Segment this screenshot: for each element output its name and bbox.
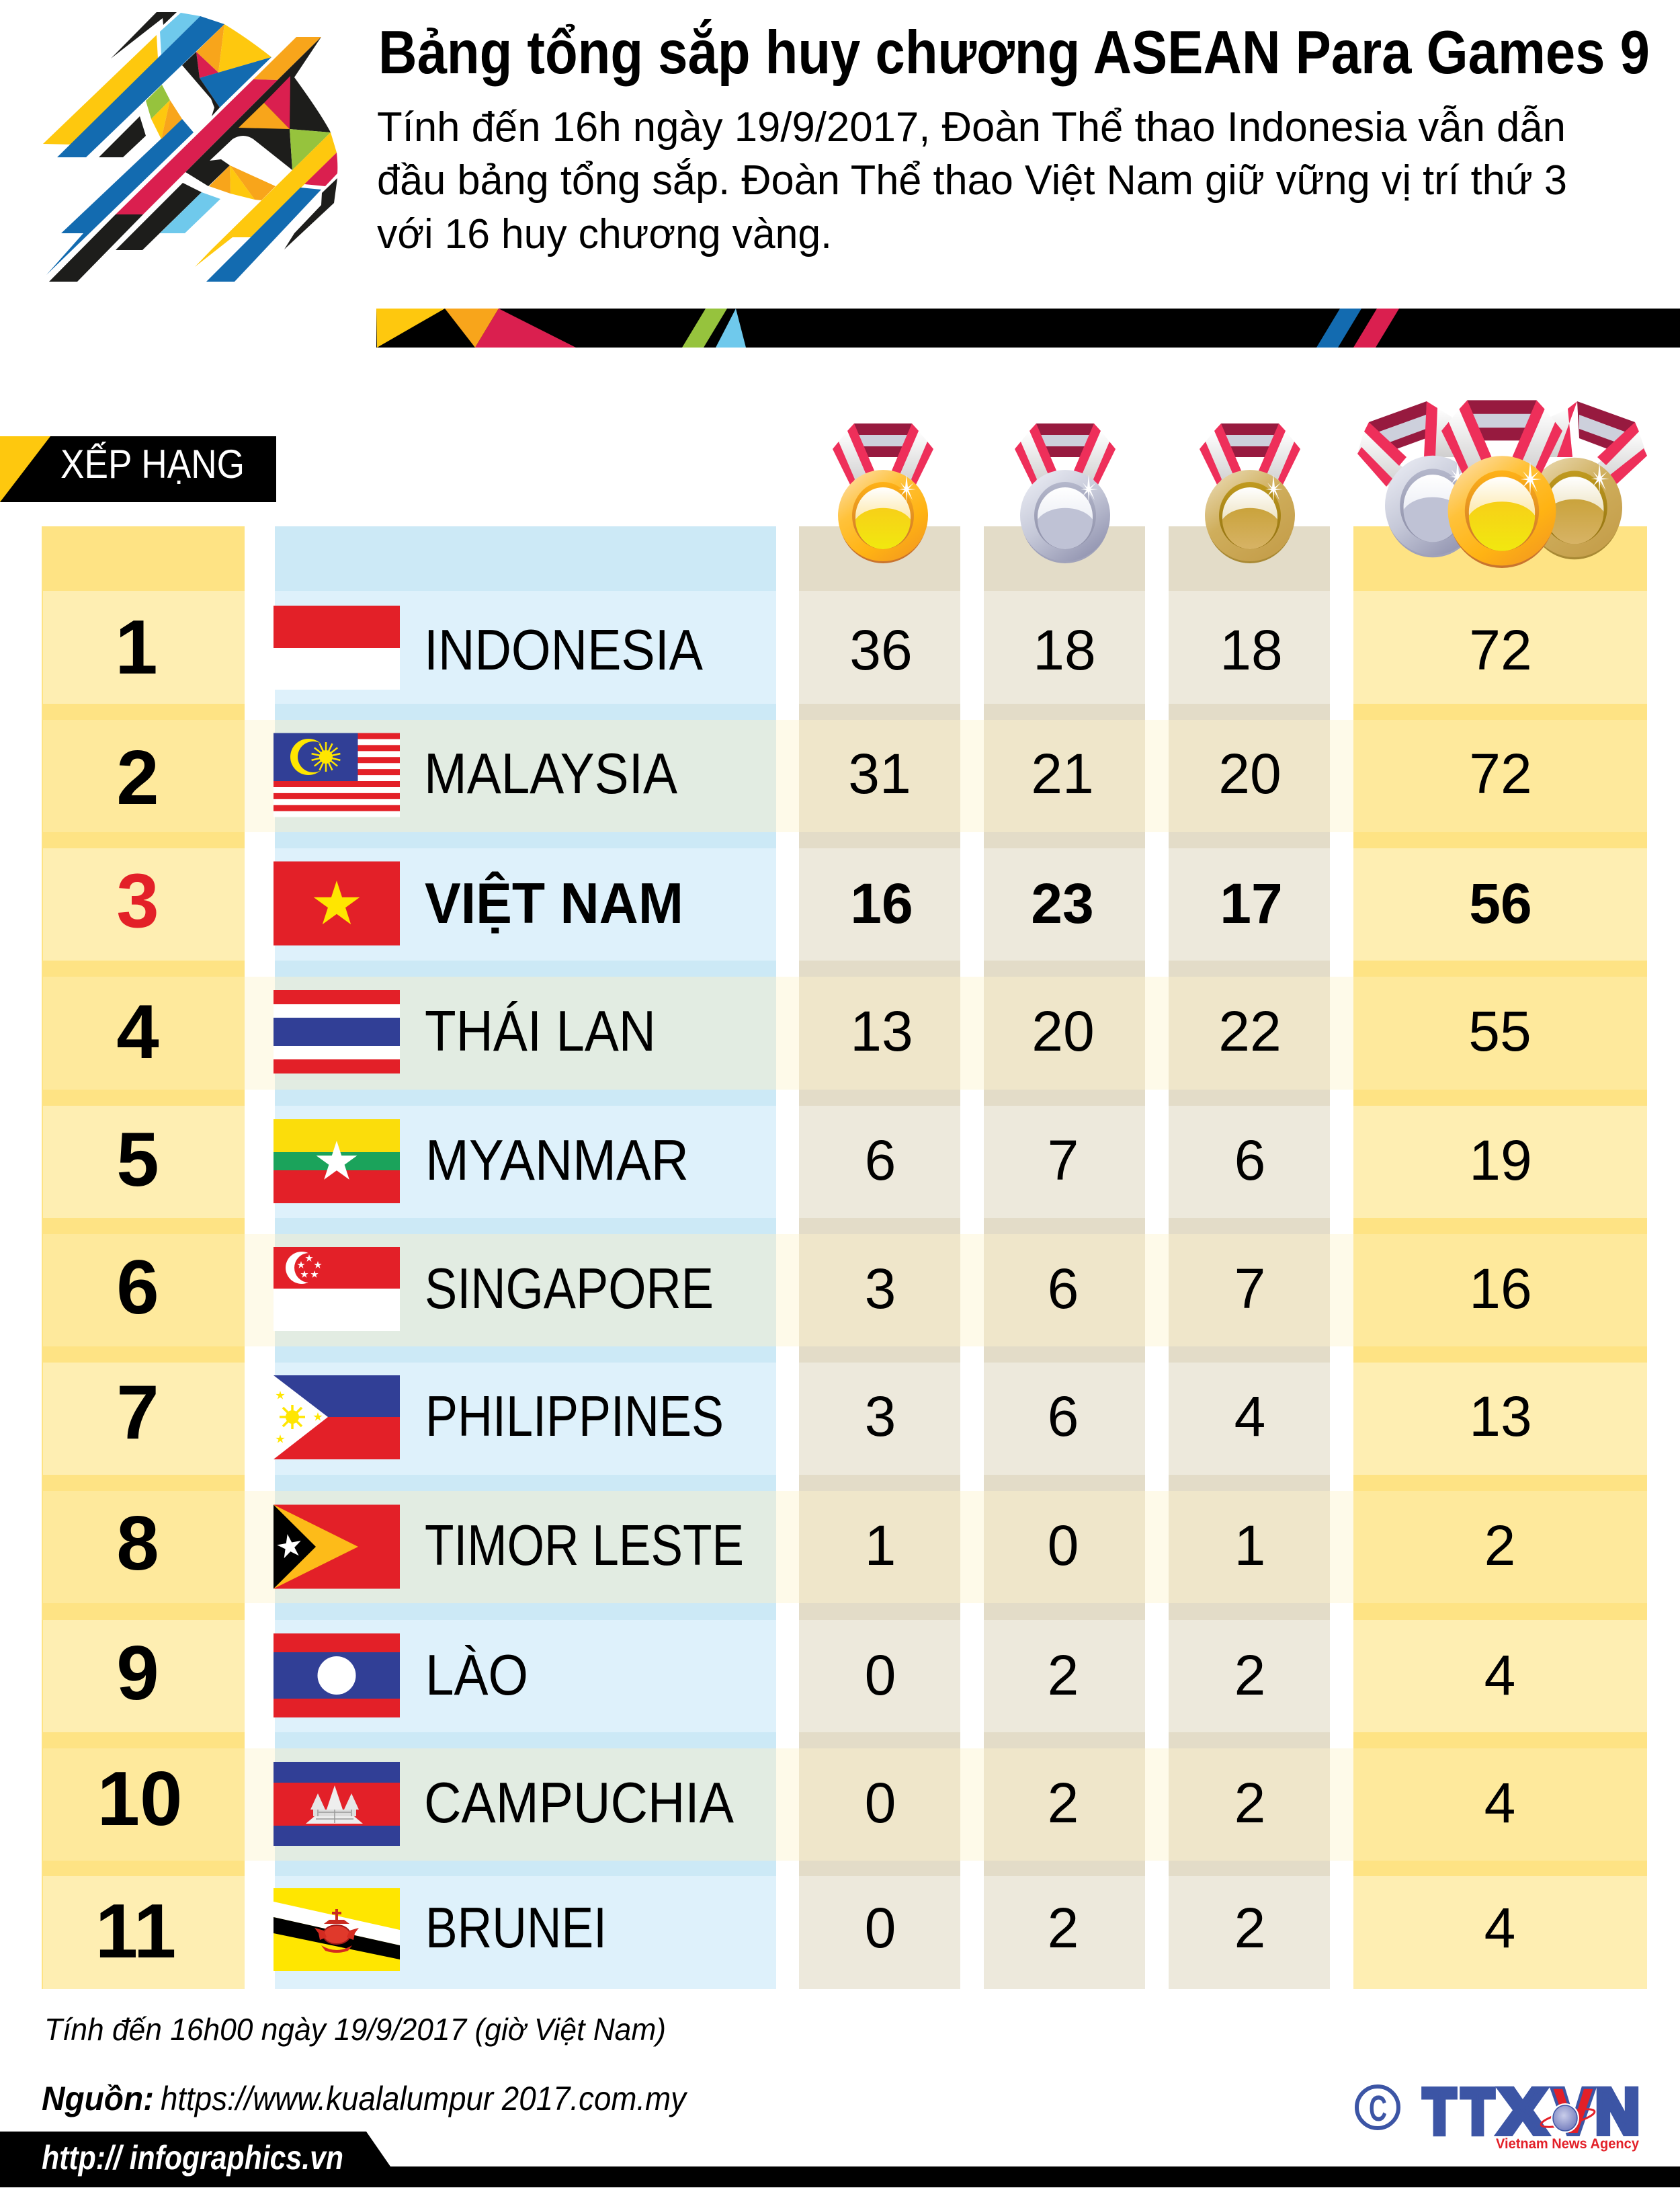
intro text [377,104,1567,257]
source: Nguồn: [42,2080,154,2117]
ranking label: XẾP HẠNG [60,442,245,487]
country: Timor Leste: TIMOR LESTE [425,1514,744,1578]
medal counts: Malaysia [848,742,1532,805]
row 5: Myanmar [43,1106,1647,1218]
medal counts: Singapore: 6 [1048,1257,1079,1320]
medal counts: Myanmar: 7 [1048,1129,1079,1192]
agency name: Vietnam News Agency [1496,2136,1639,2152]
medal counts: Philippines: 4 [1234,1385,1265,1448]
bronze ribbon [1548,401,1647,484]
country: Philippines: PHILIPPINES [425,1385,724,1449]
medal counts: Laos: 2 [1234,1644,1265,1707]
gold medal [1441,400,1562,568]
country: Brunei: BRUNEI [425,1896,607,1960]
header stripe bar [376,309,1680,348]
rank 5: 5 [116,1117,159,1203]
note: data time: Tính đến 16h00 ngày 19/9/2017 (giờ Việt Nam) [44,2012,666,2047]
medal counts: Brunei: 2 [1234,1896,1265,1959]
rank 4: 4 [116,989,159,1075]
bronze medal [1527,458,1622,559]
rank 7: 7 [116,1370,159,1455]
rank 3: 3 [116,858,159,944]
source: https://www.kualalumpur 2017.com.my [161,2080,688,2117]
ranking label [0,436,276,502]
flag: Malaysia [274,733,400,817]
medal counts: Laos [865,1644,1515,1707]
medal counts: Viet Nam: 23 [1031,872,1094,935]
medal counts: Cambodia: 4 [1484,1771,1515,1834]
country: Indonesia: INDONESIA [424,618,703,682]
medal counts: Malaysia: 72 [1469,742,1532,805]
medal counts: Myanmar [865,1129,1532,1192]
flag: Viet Nam [274,862,400,945]
footer bar [0,2132,1680,2187]
rank 10: 10 [97,1756,182,1842]
medal counts: Indonesia: 72 [1469,618,1532,682]
rank 6: 6 [116,1245,159,1330]
medal counts: Brunei [865,1896,1515,1959]
medal counts: Laos: 0 [865,1644,896,1707]
medal counts: Laos: 2 [1048,1644,1079,1707]
medal counts: Timor Leste: 1 [865,1514,896,1577]
medal counts: Cambodia: 0 [865,1771,896,1834]
medal counts: Malaysia: 20 [1218,742,1282,805]
medal counts: Thailand [850,1000,1531,1063]
medal counts: Philippines: 13 [1469,1385,1532,1448]
country: Singapore: SINGAPORE [425,1257,714,1321]
flag: Thailand [274,990,400,1073]
medal counts: Timor Leste: 1 [1234,1514,1265,1577]
medal counts: Thailand: 13 [850,1000,913,1063]
copyright mark: C [1369,2089,1387,2129]
TTXVN logo: V [1553,2076,1593,2147]
rank 1: 1 [115,605,158,690]
medal counts: Cambodia [865,1771,1515,1834]
medal counts: Malaysia: 31 [848,742,911,805]
icon: silver medal [1015,423,1116,563]
medal counts: Singapore: 16 [1469,1257,1532,1320]
country: Myanmar: MYANMAR [425,1129,689,1192]
medal counts: Philippines: 3 [865,1385,896,1448]
rank 9: 9 [116,1631,159,1716]
website: http:// infographics.vn [42,2139,343,2177]
icon: three medals for total column [1357,400,1647,568]
medal counts: Brunei: 0 [865,1896,896,1959]
medal counts: Indonesia: 18 [1033,618,1096,682]
medal counts: Singapore [865,1257,1532,1320]
medal counts: Singapore: 3 [865,1257,896,1320]
medal counts: Indonesia [849,618,1532,682]
intro text: đầu bảng tổng sắp. Đoàn Thể thao Việt Nam giữ vững vị trí thứ 3 [377,157,1567,204]
TTXVN logo: X [1499,2076,1546,2147]
medal counts: Thailand: 22 [1218,1000,1282,1063]
medal counts: Myanmar: 6 [1234,1129,1265,1192]
medal counts: Indonesia: 36 [849,618,913,682]
country: Malaysia: MALAYSIA [424,742,677,806]
intro text: với 16 huy chương vàng. [377,211,832,257]
copyright mark [1357,2086,1398,2129]
row 6: Singapore [43,1234,1647,1346]
country: Thailand: THÁI LAN [425,1000,656,1063]
medal counts: Cambodia: 2 [1048,1771,1079,1834]
logo: ASEAN Para Games 9 [43,12,337,282]
row 3: Viet Nam [43,848,1647,961]
medal counts: Philippines: 6 [1048,1385,1079,1448]
row 2: Malaysia [43,720,1647,832]
medal counts: Thailand: 55 [1468,1000,1531,1063]
row 10: Cambodia [43,1748,1647,1861]
rank 8: 8 [116,1501,159,1586]
table column backgrounds [42,526,1647,1989]
TTXVN logo: T [1423,2076,1456,2147]
icon: bronze medal [1200,423,1300,563]
medal counts: Laos: 4 [1484,1644,1515,1707]
flag: Laos [274,1633,400,1717]
TTXVN logo: N [1595,2076,1640,2147]
medal counts: Viet Nam [850,872,1532,935]
TTXVN logo: T [1462,2076,1494,2147]
medal counts: Philippines [865,1385,1532,1448]
row 11: Brunei [43,1876,1647,1989]
medal counts: Singapore: 7 [1234,1257,1265,1320]
flag: Indonesia [274,606,400,690]
medal counts: Indonesia: 18 [1220,618,1283,682]
row 9: Laos [43,1620,1647,1732]
intro text: Tính đến 16h ngày 19/9/2017, Đoàn Thể thao Indonesia vẫn dẫn [377,104,1566,151]
TTXVN logo [1423,2076,1640,2152]
medal counts: Viet Nam: 56 [1469,872,1532,935]
medal counts: Cambodia: 2 [1234,1771,1265,1834]
silver ribbon [1357,401,1462,487]
flag: Brunei [274,1888,400,1971]
country: Viet Nam: VIỆT NAM [425,871,683,936]
TTXVN logo: V [1553,2076,1593,2147]
medal counts: Timor Leste [865,1514,1515,1577]
medal counts: Timor Leste: 2 [1484,1514,1515,1577]
flag: Cambodia [274,1762,400,1846]
icon: gold medal [833,423,933,563]
row 7: Philippines [43,1363,1647,1475]
medal counts: Brunei: 4 [1484,1896,1515,1959]
rank 11: 11 [95,1889,176,1974]
row 1: Indonesia [43,591,1647,704]
medal counts: Timor Leste: 0 [1048,1514,1079,1577]
medal counts: Viet Nam: 17 [1220,872,1283,935]
medal counts: Myanmar: 19 [1469,1129,1532,1192]
medal counts: Viet Nam: 16 [850,872,913,935]
country: Laos: LÀO [425,1644,528,1707]
silver medal [1385,456,1480,557]
medal counts: Myanmar: 6 [865,1129,896,1192]
flag: Philippines [274,1375,400,1459]
medal counts: Brunei: 2 [1048,1896,1079,1959]
flag: Singapore [274,1247,400,1331]
flag: Timor Leste [274,1504,400,1589]
row 8: Timor Leste [43,1491,1647,1603]
medal counts: Malaysia: 21 [1031,742,1094,805]
country: Cambodia: CAMPUCHIA [424,1771,734,1835]
rank 2: 2 [116,735,159,821]
medal counts: Thailand: 20 [1032,1000,1095,1063]
flag: Myanmar [274,1119,400,1203]
row 4: Thailand [43,977,1647,1090]
